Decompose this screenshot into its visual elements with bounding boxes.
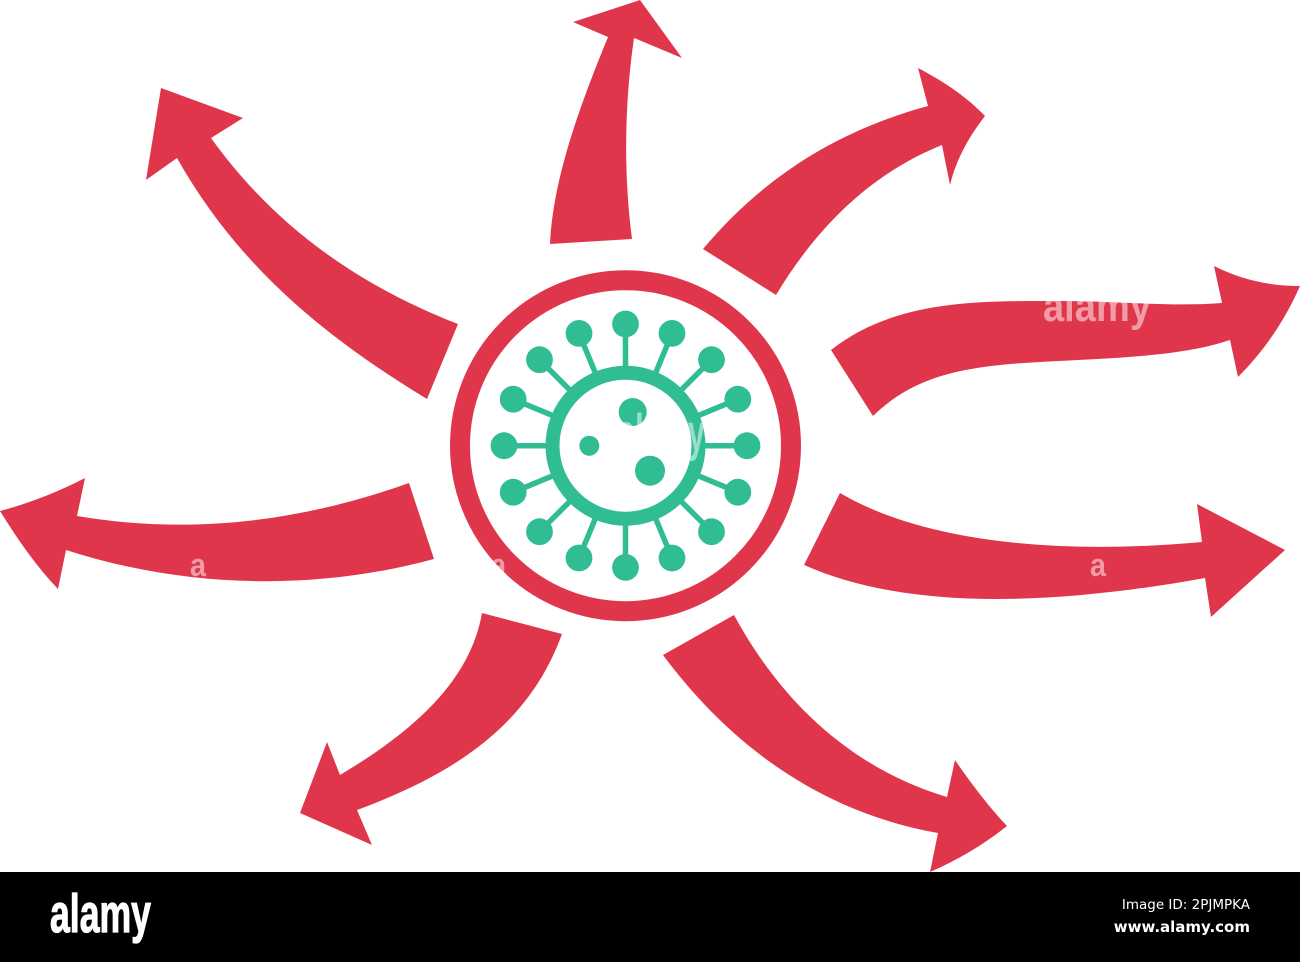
arrow: top left [146,88,458,399]
ring around virus [460,280,791,611]
watermark: centre: alamy [618,404,705,462]
virus body [552,373,698,519]
arrow: top [550,0,682,244]
arrow: right upper [831,266,1300,416]
arrow: bottom right [663,615,1007,872]
arrow: right lower [804,493,1285,617]
arrow: left [0,478,434,589]
footer logo: alamy [50,884,151,944]
website: www.alamy.com [1114,918,1250,936]
virus spikes [504,324,747,567]
watermark: lower right arrow letter: a [1090,547,1106,583]
virus spike tips [491,311,760,581]
watermark: right arrow: alamy [1043,282,1151,331]
watermark overlays [190,282,1151,583]
arrow: bottom left [300,613,562,845]
watermark: ring letter: a [491,547,506,583]
virus inner spots [579,398,665,486]
image id: Image ID: 2PJMPKA [1122,897,1251,913]
footer bar [0,872,1300,962]
watermark: left arrow letter: a [190,547,206,583]
icon: virus [491,311,760,581]
arrow: top right [703,68,985,295]
